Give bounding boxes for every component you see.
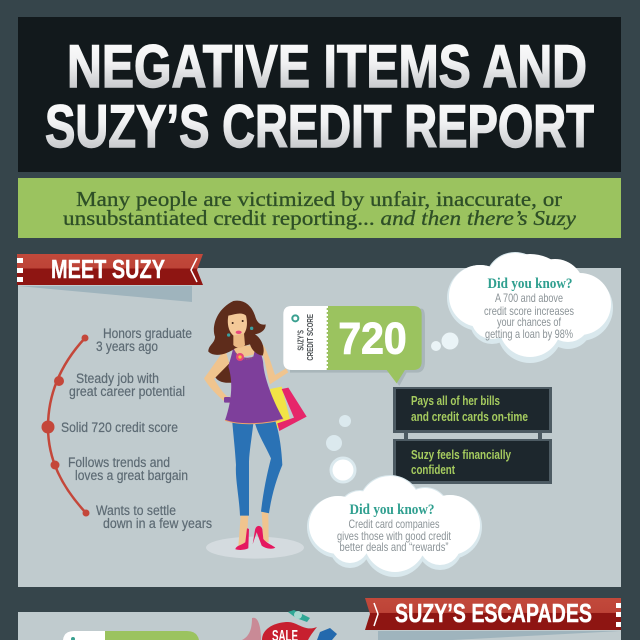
thought bubbles upper [431,332,458,351]
subtitle band [18,178,621,238]
illustration: suzy [204,301,307,559]
cloud text: your chances of [497,315,562,329]
icon: high heel [242,618,261,640]
ribbon shadow fold [378,631,621,640]
facts list: down in a few years [103,516,212,531]
sale tag [262,622,317,640]
sign: feels confident: Suzy feels financially [411,447,512,462]
score ticket: CREDIT SCORE [305,314,315,361]
cloud: did you know lower [307,475,482,577]
cloud text [337,517,452,554]
facts list: loves a great bargain [75,468,188,483]
facts list: Follows trends and [68,455,170,470]
cloud: did you know upper [447,252,613,363]
ribbon: suzy's escapades [365,598,621,630]
cloud heading: Did you know? [350,502,434,518]
score ticket partial [63,631,199,640]
panel: suzy's escapades [18,612,621,640]
cloud text: gives those with good credit [337,529,452,543]
heading: meet suzy: MEET SUZY [51,254,165,284]
cloud text: A 700 and above [495,291,563,305]
cloud text: Credit card companies [348,517,440,531]
cloud text [484,291,574,341]
subtitle line 2: unsubstantiated credit reporting... and then there’s Suzy [63,206,577,230]
sign: pays bills: and credit cards on-time [411,409,528,424]
sign: pays bills [393,387,552,433]
ribbon: meet suzy [17,254,203,285]
sign: feels confident: confident [411,462,455,477]
sign: pays bills: Pays all of her bills [411,393,500,408]
facts list: great career potential [69,384,185,399]
cloud text: credit score increases [484,304,574,318]
thought bubbles lower [326,415,356,484]
cloud heading: Did you know? [488,276,572,292]
arc timeline [42,334,90,516]
score ticket [283,306,425,386]
cloud text: better deals and “rewards” [340,540,448,554]
sign connectors [404,431,542,443]
facts list: 3 years ago [96,339,158,354]
facts list: Honors graduate [103,326,192,341]
title panel [18,17,621,172]
ribbon shadow fold [18,286,192,302]
facts list: Solid 720 credit score [61,420,178,435]
facts list [61,326,212,531]
ticket label: SUZY’S [295,330,305,351]
score 720: 720 [338,314,407,363]
cloud text: getting a loan by 98% [485,327,573,341]
subtitle line 1: Many people are victimized by unfair, inaccurate, or [76,187,562,211]
sign: feels confident [393,439,552,484]
icon: blue bag [317,628,337,640]
icon: teal watch [288,610,310,622]
facts list: Steady job with [76,371,159,386]
facts list: Wants to settle [96,503,176,518]
panel: meet suzy [18,268,621,587]
